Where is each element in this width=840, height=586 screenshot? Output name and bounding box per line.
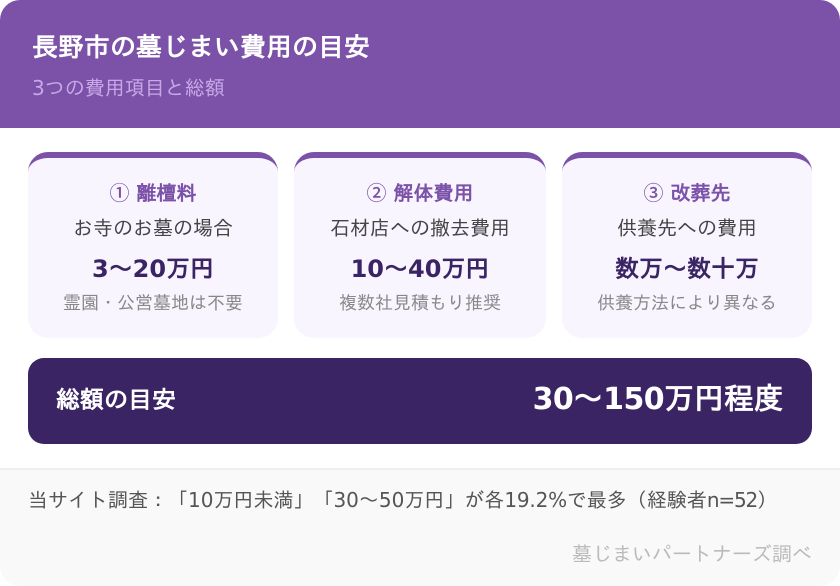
card value: 10～40万円 [351, 255, 489, 283]
card description: 供養先への費用 [617, 216, 757, 240]
card value: 数万～数十万 [615, 255, 759, 283]
card label: ② 解体費用 [367, 177, 473, 206]
card note: 霊園・公営墓地は不要 [63, 293, 243, 314]
total bar [28, 358, 812, 444]
header band [0, 0, 840, 128]
footer panel [0, 468, 840, 586]
survey note: 当サイト調査：「10万円未満」「30～50万円」が各19.2%で最多（経験者n=52） [28, 488, 777, 512]
card description: 石材店への撤去費用 [330, 216, 510, 240]
card description: お寺のお墓の場合 [73, 216, 233, 240]
card note: 複数社見積もり推奨 [339, 293, 501, 314]
card note: 供養方法により異なる [597, 293, 777, 314]
card label: ③ 改葬先 [644, 177, 730, 206]
card label: ① 離檀料 [110, 177, 196, 206]
panel: 改葬先 [562, 152, 812, 338]
total label: 総額の目安 [56, 386, 176, 414]
panel: 解体費用 [294, 152, 546, 338]
card value: 3～20万円 [92, 255, 214, 283]
source credit: 墓じまいパートナーズ調べ [572, 542, 812, 566]
total value: 30～150万円程度 [533, 382, 784, 417]
title: 長野市の墓じまい費用の目安 [32, 33, 370, 63]
subtitle: 3つの費用項目と総額 [32, 76, 225, 100]
panel: 離檀料 [28, 152, 278, 338]
